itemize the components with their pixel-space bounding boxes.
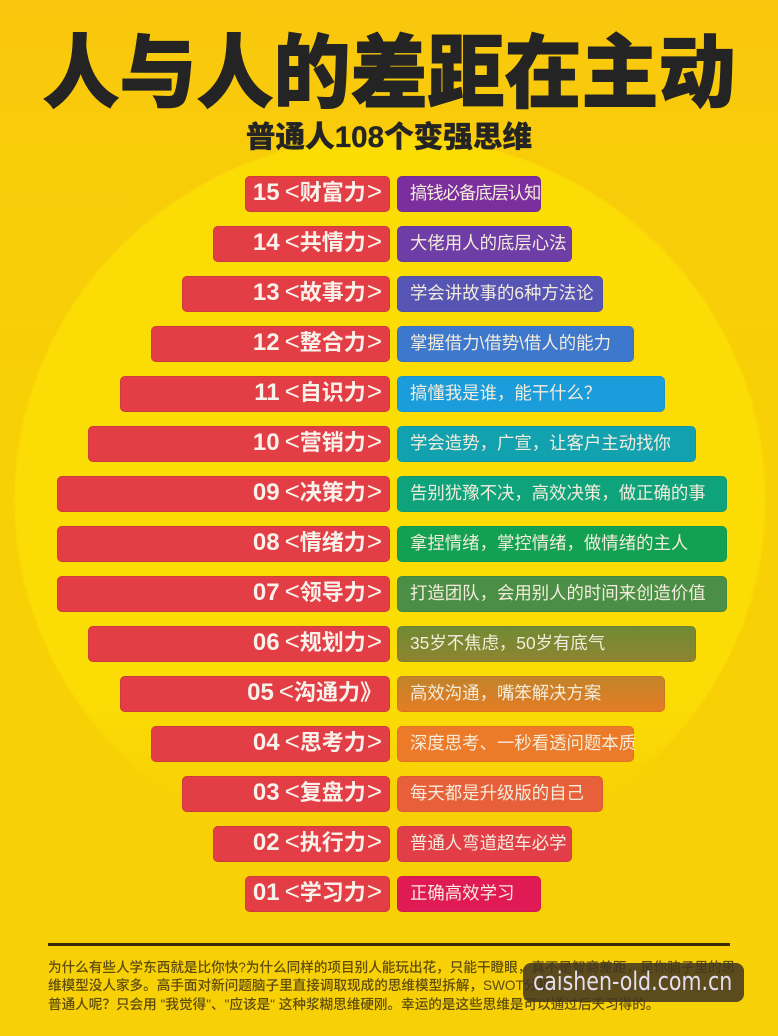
label 02	[213, 826, 390, 862]
label 06: 06<规划力>	[253, 626, 382, 656]
label 09: 09<决策力>	[253, 476, 382, 506]
background sun circle	[14, 135, 766, 736]
label 10	[88, 426, 390, 462]
label 11	[120, 376, 390, 412]
watermark	[523, 963, 744, 1002]
title: 人与人的差距在主动	[42, 29, 736, 119]
label 10: 10<营销力>	[253, 426, 382, 456]
description 15: 搞钱必备底层认知	[410, 183, 540, 203]
label 13: 13<故事力>	[253, 276, 382, 306]
label 12: 12<整合力>	[253, 326, 382, 356]
footer paragraph: 维模型没人家多。高手面对新问题脑子里直接调取现成的思维模型拆解，SWOT分析、	[48, 978, 565, 993]
label 13	[182, 276, 390, 312]
label 07: 07<领导力>	[253, 576, 382, 606]
footer paragraph	[48, 960, 735, 1012]
description 11: 搞懂我是谁，能干什么？	[410, 383, 601, 403]
label 03: 03<复盘力>	[253, 776, 382, 806]
description 13	[397, 276, 603, 312]
description 03	[397, 776, 603, 812]
panel: ability rows	[57, 176, 727, 912]
description 10	[397, 426, 696, 462]
description 06: 35岁不焦虑，50岁有底气	[410, 633, 605, 653]
label 08: 08<情绪力>	[253, 526, 382, 556]
description 01	[397, 876, 541, 912]
description 13: 学会讲故事的6种方法论	[410, 283, 594, 303]
description 03: 每天都是升级版的自己	[410, 783, 584, 803]
label 09	[57, 476, 390, 512]
description 05: 高效沟通，嘴笨解决方案	[410, 683, 601, 703]
description 01: 正确高效学习	[410, 883, 514, 903]
description 11	[397, 376, 665, 412]
description 14: 大佬用人的底层心法	[410, 233, 567, 253]
description 15	[397, 176, 541, 212]
label 05: 05<沟通力》	[247, 676, 382, 706]
description 08	[397, 526, 727, 562]
description 08: 拿捏情绪，掌控情绪，做情绪的主人	[410, 533, 688, 553]
label 04: 04<思考力>	[253, 726, 382, 756]
label 06	[88, 626, 390, 662]
description 05	[397, 676, 665, 712]
description 12: 掌握借力\借势\借人的能力	[410, 333, 611, 353]
description 07	[397, 576, 727, 612]
label 15: 15<财富力>	[253, 176, 382, 206]
label 01: 01<学习力>	[253, 876, 382, 906]
footer paragraph: 普通人呢？只会用 "我觉得"、"应该是" 这种浆糊思维硬刚。幸运的是这些思维是可以通过后天习得的。	[48, 997, 659, 1012]
description 14	[397, 226, 572, 262]
label 14	[213, 226, 390, 262]
label 14: 14<共情力>	[253, 226, 382, 256]
description 10: 学会造势，广宣，让客户主动找你	[410, 433, 671, 453]
description 06	[397, 626, 696, 662]
description 04: 深度思考、一秒看透问题本质	[410, 733, 636, 753]
label 12	[151, 326, 390, 362]
description 02	[397, 826, 572, 862]
label 02: 02<执行力>	[253, 826, 382, 856]
watermark: caishen-old.com.cn	[533, 967, 732, 997]
label 07	[57, 576, 390, 612]
description 04	[397, 726, 634, 762]
label 04	[151, 726, 390, 762]
label 11: 11<自识力>	[254, 376, 382, 406]
description 02: 普通人弯道超车必学	[410, 833, 567, 853]
description 12	[397, 326, 634, 362]
label 05	[120, 676, 390, 712]
label 03	[182, 776, 390, 812]
description 07: 打造团队，会用别人的时间来创造价值	[410, 583, 706, 603]
footer paragraph: 为什么有些人学东西就是比你快?为什么同样的项目别人能玩出花，只能干瞪眼，真不是智商差距，是你脑子里的思	[48, 960, 735, 975]
description 09	[397, 476, 727, 512]
subtitle: 普通人108个变强思维	[246, 121, 532, 154]
description 09: 告别犹豫不决，高效决策，做正确的事	[410, 483, 706, 503]
label 08	[57, 526, 390, 562]
